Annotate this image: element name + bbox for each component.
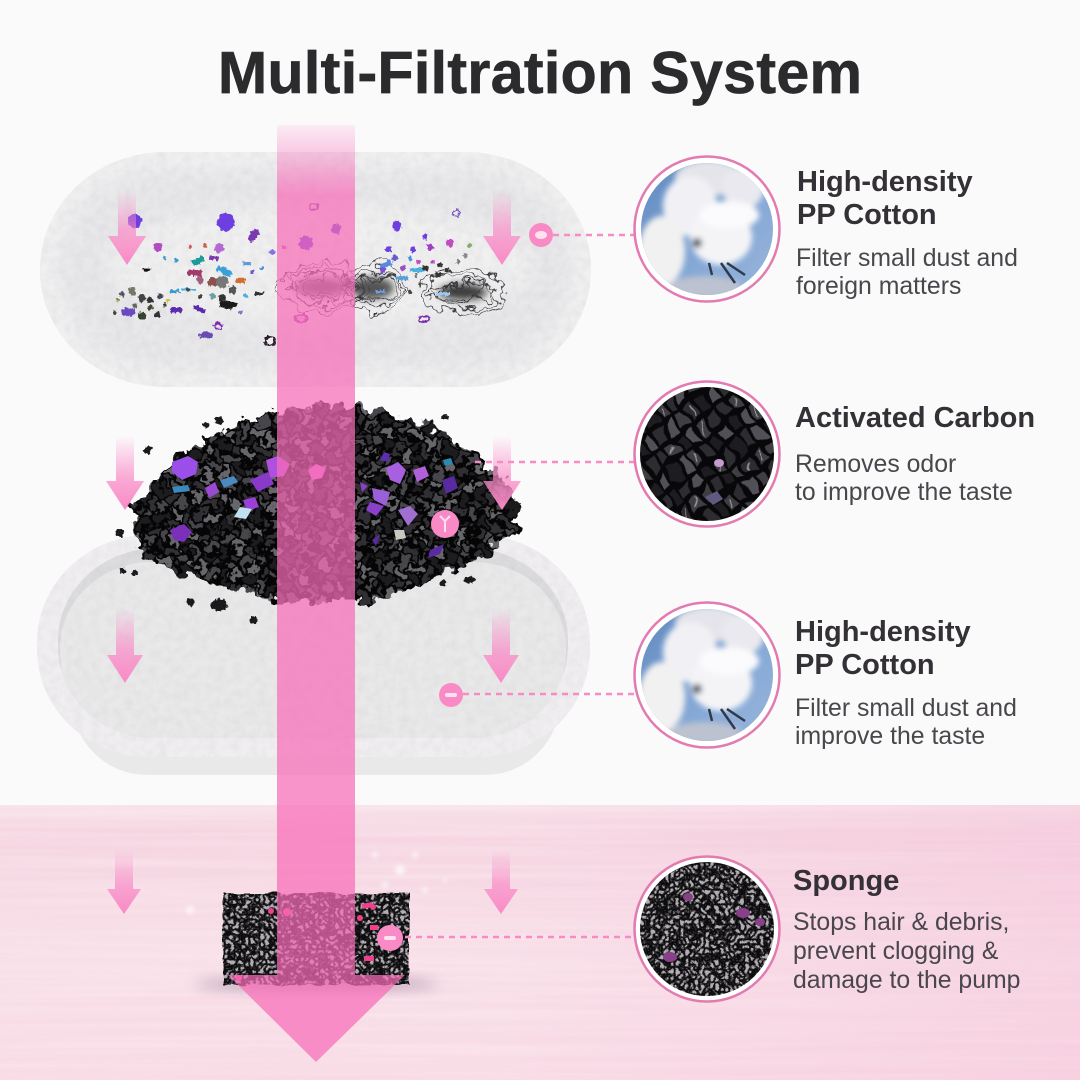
callout: PP cotton top	[529, 156, 780, 302]
text: activated carbon	[795, 402, 1035, 506]
text: activated carbon: Activated Carbon	[795, 402, 1035, 434]
text: PP cotton lower: High-density	[795, 616, 971, 648]
debris on top pad	[113, 204, 505, 345]
text: sponge: damage to the pump	[793, 967, 1020, 994]
arrow row 2 right	[483, 435, 521, 510]
text: sponge: Sponge	[793, 865, 899, 897]
arrow row 1 right	[483, 190, 521, 265]
callout: PP cotton lower	[439, 602, 780, 748]
text: activated carbon: to improve the taste	[795, 479, 1013, 506]
sponge pink particles	[236, 902, 378, 981]
sponge	[223, 893, 409, 985]
arrow row 2 left	[106, 435, 144, 510]
sponge shadow	[194, 979, 438, 989]
text: PP cotton top: PP Cotton	[797, 199, 937, 231]
mixed colour specks	[113, 204, 472, 345]
text: PP cotton lower	[795, 616, 1017, 750]
sparkles above sponge	[186, 852, 447, 914]
hair clumps	[278, 263, 505, 314]
carbon pile	[116, 405, 520, 624]
stray carbon chips	[116, 415, 520, 624]
pink floor	[0, 805, 1080, 1080]
callout: sponge	[377, 856, 780, 1002]
text: activated carbon: Removes odor	[795, 451, 956, 478]
text: PP cotton lower: improve the taste	[795, 723, 985, 750]
large central flow arrow	[228, 125, 405, 1062]
text: PP cotton top: High-density	[797, 166, 973, 198]
text: sponge	[793, 865, 1020, 994]
filter pad: top PP cotton	[40, 152, 591, 387]
arrow row 4 left	[107, 850, 141, 914]
arrow row 3 left	[107, 608, 143, 683]
text: PP cotton top: foreign matters	[796, 273, 961, 300]
text: PP cotton lower: Filter small dust and	[795, 695, 1017, 722]
arrow row 4 right	[484, 850, 518, 914]
text: sponge: Stops hair & debris,	[793, 909, 1009, 936]
title: Multi-Filtration System	[218, 40, 862, 106]
text: PP cotton top: Filter small dust and	[796, 245, 1018, 272]
purple splats	[128, 213, 454, 255]
small flow arrows	[106, 190, 521, 914]
callout: activated carbon	[431, 382, 780, 538]
filter pad: lower PP cotton	[37, 535, 590, 775]
text: PP cotton top	[796, 166, 1018, 300]
arrow row 1 left	[108, 190, 146, 265]
text: sponge: prevent clogging &	[793, 938, 999, 965]
purple chips in carbon	[170, 452, 458, 558]
arrow row 3 right	[483, 608, 519, 683]
text: PP cotton lower: PP Cotton	[795, 649, 935, 681]
